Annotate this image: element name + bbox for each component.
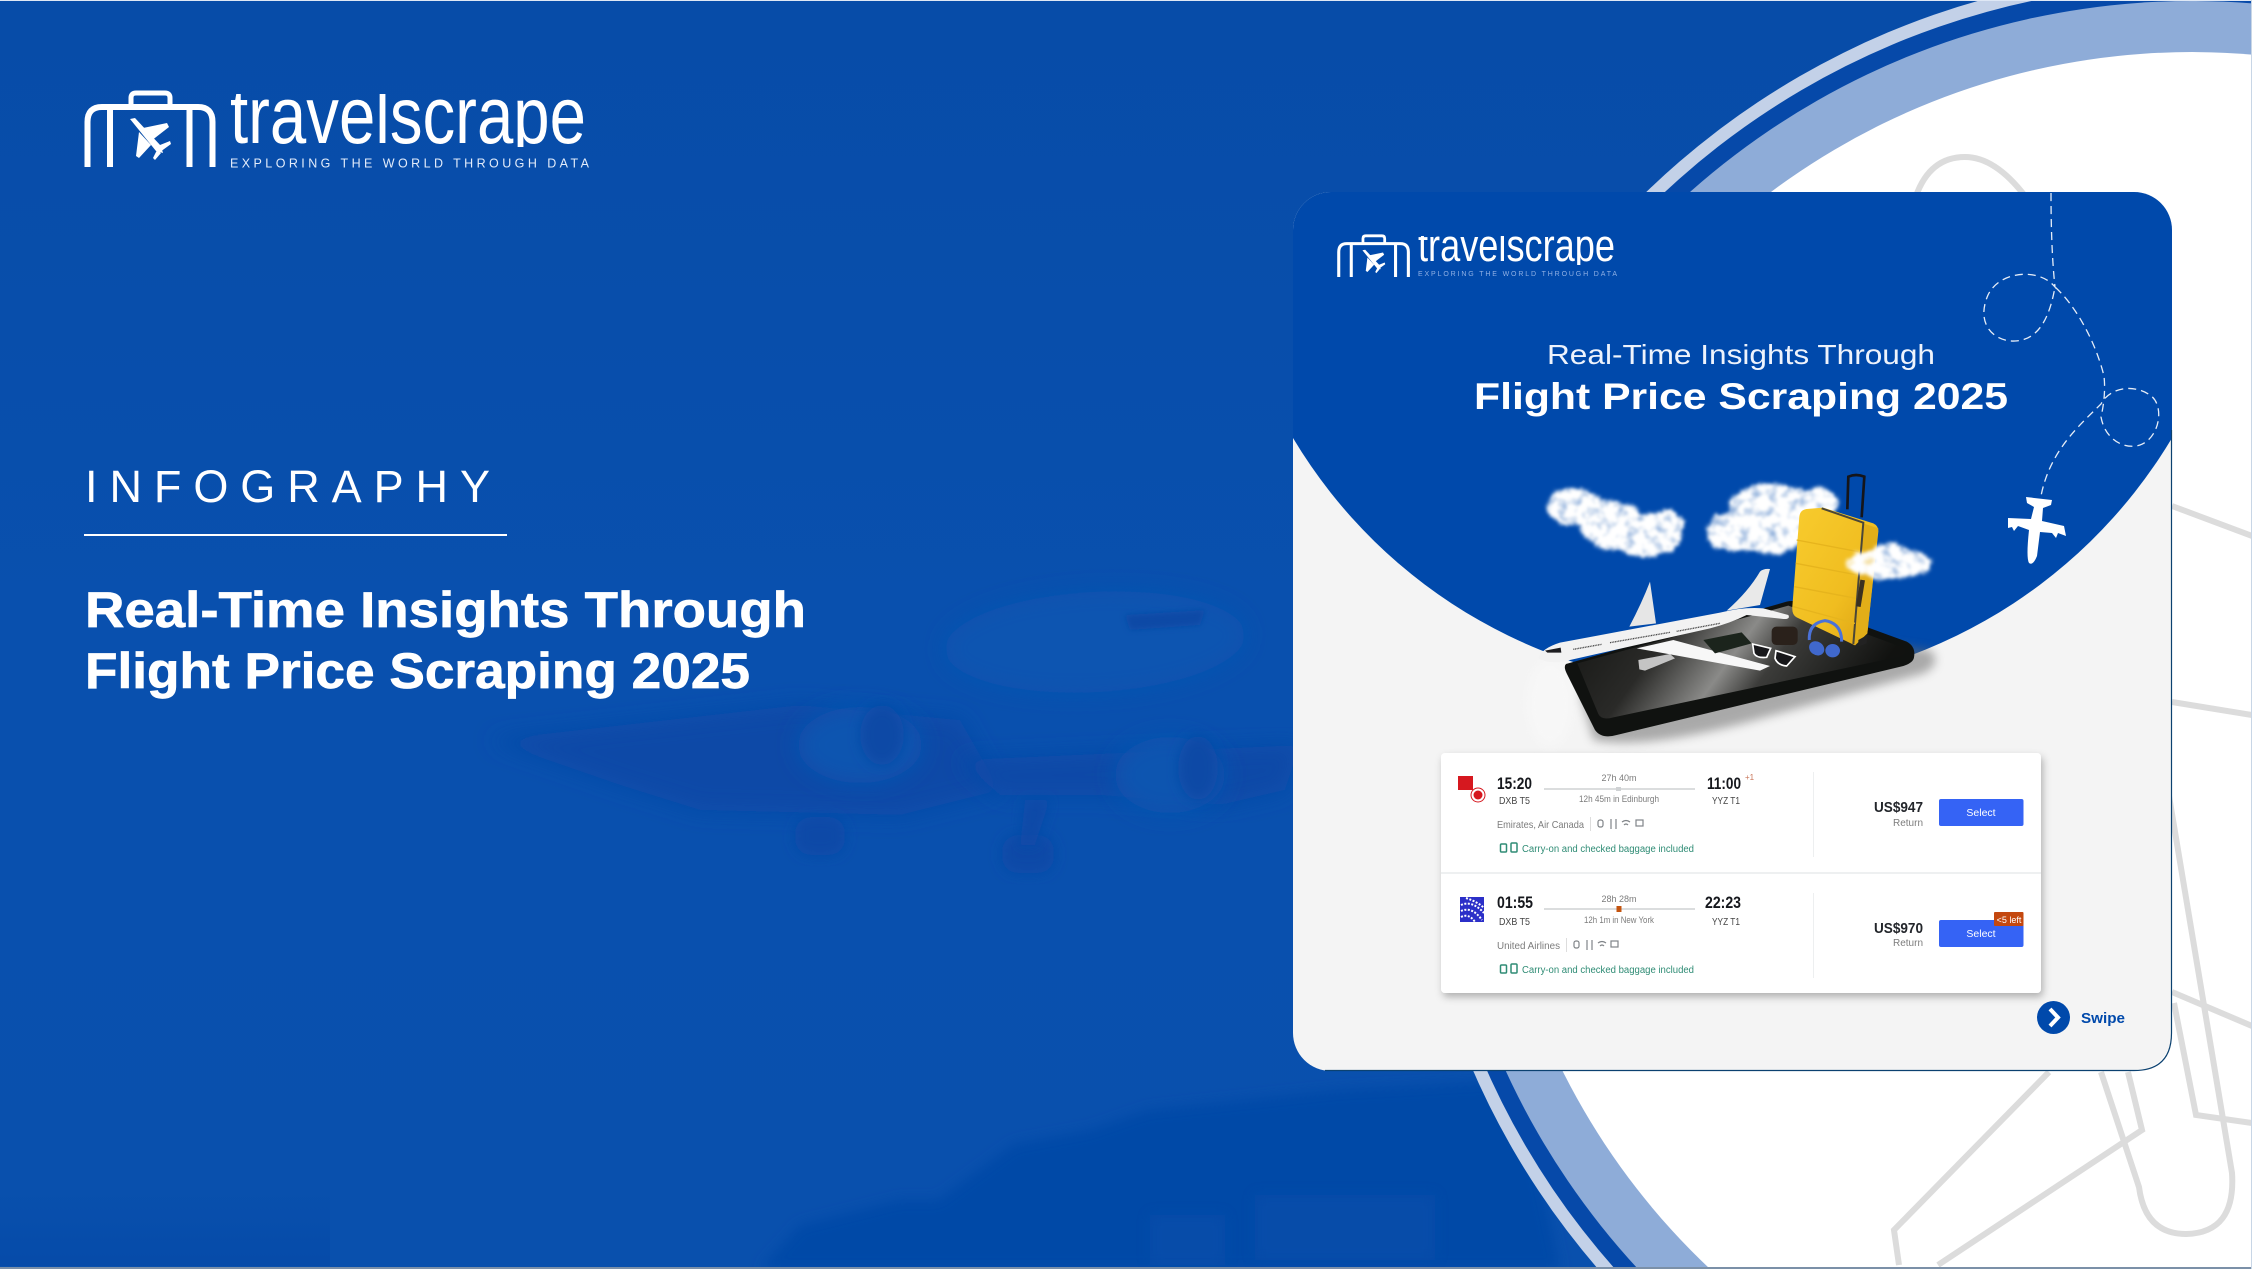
flight results card bbox=[1441, 753, 2041, 993]
icon: white airplane silhouette bbox=[2008, 497, 2066, 564]
baggage info: Carry-on and checked baggage included bbox=[1522, 965, 1694, 976]
label: INFOGRAPHY: INFOGRAPHY bbox=[85, 461, 490, 512]
phone shadow bbox=[1580, 627, 1935, 743]
camera bbox=[1772, 627, 1798, 645]
phone body bbox=[1565, 601, 1914, 736]
departure time and airport: 15:20 bbox=[1497, 775, 1532, 793]
decorative arc: wide light-blue ring bbox=[1437, 1, 2252, 1269]
card logo bbox=[1337, 234, 1617, 277]
price bbox=[1874, 801, 1922, 826]
divider under label bbox=[84, 534, 507, 536]
main logo: travelscrape bbox=[84, 90, 589, 168]
main heading: Real-Time Insights Through bbox=[85, 582, 806, 638]
passport bbox=[1703, 632, 1752, 653]
flight row 1 bbox=[1458, 773, 2024, 855]
route line with duration and stopover: 27h 40m bbox=[1601, 773, 1637, 783]
background outline airplane in grey bbox=[1894, 157, 2252, 1265]
arrival time and airport: YYZ T1 bbox=[1712, 916, 1740, 928]
arrival time and airport bbox=[1708, 774, 1754, 804]
main heading: Flight Price Scraping 2025 bbox=[85, 643, 750, 699]
card heading line 1: Real-Time Insights Through bbox=[1547, 339, 1935, 370]
card logo wordmark: travelscrape bbox=[1418, 220, 1615, 271]
cloud: right, over suitcase bbox=[1848, 543, 1932, 579]
phone screen bbox=[1577, 606, 1906, 718]
price: US$970 bbox=[1874, 920, 1923, 937]
white floor glow bbox=[1527, 660, 1573, 747]
panel: social card bbox=[1293, 192, 2172, 1071]
suitcase bbox=[1792, 475, 1878, 647]
arrival time and airport bbox=[1705, 894, 1741, 928]
card right and bottom edge bbox=[1325, 430, 2172, 1070]
arrival time and airport: YYZ T1 bbox=[1712, 795, 1740, 807]
decorative arc: thin pale ring bbox=[1407, 0, 2252, 1269]
select button with seats-left badge: Select bbox=[1966, 928, 1996, 940]
select button: Select bbox=[1966, 807, 1996, 819]
icon: Air Canada logo bbox=[1471, 788, 1485, 802]
route line with duration and stopover bbox=[1544, 894, 1695, 926]
airline name and amenities: United Airlines bbox=[1497, 940, 1560, 952]
cloud: middle bbox=[1707, 483, 1838, 555]
icon: United Airlines globe logo bbox=[1460, 897, 1484, 922]
route line with duration and stopover bbox=[1544, 773, 1695, 805]
card logo tagline: EXPLORING THE WORLD THROUGH DATA bbox=[1418, 271, 1617, 278]
price: US$947 bbox=[1874, 799, 1923, 816]
departure time and airport bbox=[1498, 778, 1532, 804]
departure time and airport: DXB T5 bbox=[1499, 795, 1530, 807]
sunglasses bbox=[1753, 644, 1795, 666]
price: Return bbox=[1893, 938, 1923, 949]
logo wordmark: travelscrape bbox=[230, 71, 586, 161]
dashed flight path bbox=[1984, 193, 2159, 496]
swipe control bbox=[2037, 1001, 2125, 1034]
swipe control: Swipe bbox=[2081, 1010, 2125, 1027]
decorative arc: blue gap bbox=[1420, 0, 2252, 1269]
route line with duration and stopover: 12h 1m in New York bbox=[1584, 915, 1654, 926]
airline names and amenities: Emirates, Air Canada bbox=[1497, 819, 1584, 831]
airline names and amenities bbox=[1497, 817, 1643, 831]
flight row 2 bbox=[1460, 894, 2024, 976]
arrival time and airport: 11:00 bbox=[1707, 775, 1741, 793]
departure time and airport: DXB T5 bbox=[1499, 916, 1530, 928]
arrival time and airport: 22:23 bbox=[1705, 894, 1741, 912]
price: Return bbox=[1893, 818, 1923, 829]
airline name and amenities bbox=[1497, 938, 1618, 952]
illustration: phone, plane, suitcase and clouds bbox=[1527, 475, 1935, 747]
select button with seats-left badge: <5 left bbox=[1997, 915, 2022, 925]
baggage info: Carry-on and checked baggage included bbox=[1522, 844, 1694, 855]
logo tagline: EXPLORING THE WORLD THROUGH DATA bbox=[230, 156, 590, 170]
card blue semicircle header bbox=[1293, 192, 2172, 687]
select button bbox=[1939, 799, 2024, 826]
departure time and airport bbox=[1498, 896, 1533, 925]
icon: suitcase with airplane bbox=[88, 93, 212, 167]
background airliner silhouette bbox=[490, 584, 1300, 873]
airplane on phone bbox=[1538, 569, 1789, 671]
route line with duration and stopover: 12h 45m in Edinburgh bbox=[1579, 794, 1659, 805]
route line with duration and stopover: 28h 28m bbox=[1601, 894, 1637, 904]
headphones bbox=[1806, 621, 1842, 658]
main heading bbox=[85, 582, 806, 699]
card logo icon bbox=[1339, 236, 1408, 277]
departure time and airport: 01:55 bbox=[1497, 894, 1533, 912]
cloud: left bbox=[1546, 488, 1683, 556]
background ground and tree line bbox=[0, 1080, 1560, 1269]
arrival time and airport: +1 bbox=[1745, 773, 1755, 782]
white circle panel bbox=[1488, 52, 2252, 1269]
icon: Emirates logo bbox=[1458, 776, 1473, 790]
select button with seats-left badge bbox=[1939, 912, 2024, 947]
price bbox=[1874, 920, 1923, 949]
card heading line 2: Flight Price Scraping 2025 bbox=[1474, 376, 2008, 417]
